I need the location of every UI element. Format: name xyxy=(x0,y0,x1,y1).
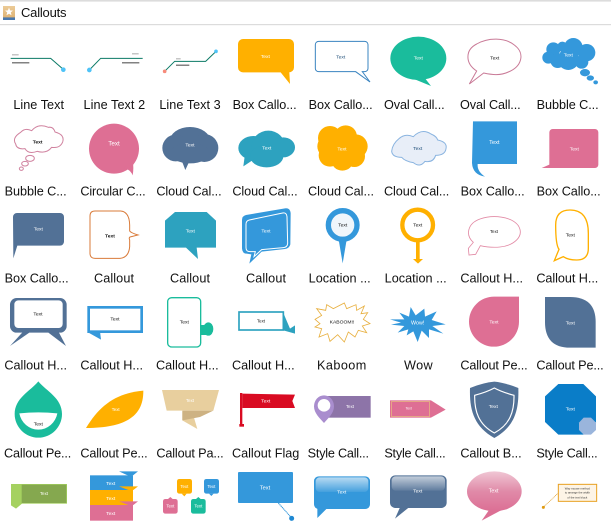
callout: Line Text 2 xyxy=(83,53,145,112)
callout: glossy blue xyxy=(314,476,370,518)
callout: Line Text 2: Line Text 2 xyxy=(83,98,145,112)
callout: Line Text 3 xyxy=(159,49,221,112)
callout: Callout blue frame: Text xyxy=(261,229,271,235)
callout: stacked ribbons: Text xyxy=(106,481,116,487)
callout: Callout Badge shield: Callout B... xyxy=(460,446,522,460)
callout: blue box with pointer xyxy=(238,472,294,521)
callout: Callout Flag xyxy=(232,393,299,460)
callout: Style green banner: Text xyxy=(40,491,49,496)
callout: Callout orange outline: Callout xyxy=(94,272,134,286)
callout: Callout Heart amber: Callout H... xyxy=(536,272,598,286)
callout: glossy dark: Text xyxy=(413,489,423,495)
callout: Cloud Callout amber xyxy=(308,125,374,199)
callout: Cloud Callout light: Text xyxy=(413,146,423,152)
callout: blue box with pointer: Text xyxy=(260,486,271,492)
callout: Location blue: Location ... xyxy=(309,272,371,286)
callout: Location blue: Text xyxy=(338,223,348,229)
callout: Cloud Callout dark xyxy=(156,127,222,199)
callout: Style Callout pink arrow xyxy=(384,400,446,460)
callout: Callout teal: Text xyxy=(186,229,196,235)
callout: Cloud Callout light xyxy=(384,132,449,199)
callout: glossy dark xyxy=(390,475,447,519)
callout: Box Callout amber: Box Callo... xyxy=(233,98,297,112)
callout: Callout Paper ribbon: Text xyxy=(186,398,195,403)
callout: Circular Callout: Text xyxy=(108,140,120,147)
callout: Oval Callout teal: Oval Call... xyxy=(384,98,445,112)
callout: annotation note: to arrange the width xyxy=(565,491,590,495)
callout: Bubble Callout outline: Bubble C... xyxy=(5,185,67,199)
callout: Callout Heart amber xyxy=(536,210,598,286)
callout: Bubble Callout blue: Bubble C... xyxy=(537,98,599,112)
callout: Callout Heart dark: Text xyxy=(33,312,43,318)
callout: Oval Callout teal xyxy=(384,37,446,112)
callout: Kaboom xyxy=(315,303,370,373)
callout: four small bubbles: Text xyxy=(180,484,189,489)
callout: four small bubbles: Text xyxy=(207,484,216,489)
callout: Callout orange outline: Text xyxy=(105,234,115,240)
callout: Box Callout pink xyxy=(537,129,601,199)
callout: Location amber xyxy=(385,210,447,286)
callout: Location amber: Location ... xyxy=(385,272,447,286)
callout: Box Callout blue: Box Callo... xyxy=(461,185,525,199)
callout: glossy pink oval xyxy=(467,471,522,521)
callout: Callout Badge shield xyxy=(460,382,522,460)
callout: Callout Petal pink: Text xyxy=(489,320,499,326)
callout: Wow: Wow! xyxy=(411,320,424,326)
callout: Cloud Callout light: Cloud Cal... xyxy=(384,185,449,199)
callout: Wow xyxy=(390,307,446,373)
callout: Callout Heart teal xyxy=(156,298,219,373)
callout: Style Callout purple pin xyxy=(308,395,371,460)
callout: Style Callout octagon xyxy=(536,384,598,460)
callout: Callout Heart teal: Callout H... xyxy=(156,359,219,373)
callout: Style Callout purple pin: Text xyxy=(346,404,355,409)
callout: Cloud Callout dark: Text xyxy=(185,143,195,149)
callout: Callout Heart small teal: Callout H... xyxy=(232,359,295,373)
callout: Box Callout outline xyxy=(309,41,373,112)
callout: Callout blue frame xyxy=(242,208,291,286)
callout: Box Callout outline: Box Callo... xyxy=(309,98,373,112)
callout: Callout Heart oval: Text xyxy=(490,229,499,234)
callout: Callout Heart dark xyxy=(4,298,67,373)
callout: Style Callout octagon: Text xyxy=(566,407,576,413)
callout: Callout blue frame: Callout xyxy=(246,272,286,286)
callout: Callout Heart small teal xyxy=(232,311,295,373)
callout: Cloud Callout teal: Cloud Cal... xyxy=(232,185,298,199)
callout: stacked ribbons: Text xyxy=(106,496,116,502)
callout: Cloud Callout teal xyxy=(232,131,298,199)
callout: Callout Flag: Text xyxy=(261,399,271,405)
callout: Callout Heart blue: Callout H... xyxy=(80,359,143,373)
callout: Box Callout amber: Text xyxy=(261,54,271,60)
callout: glossy blue: Text xyxy=(337,490,347,496)
callout: Cloud Callout amber: Text xyxy=(337,146,347,152)
callout: Style Callout pink arrow: Style Call... xyxy=(384,446,446,460)
callout: Oval Callout outline: Oval Call... xyxy=(460,98,521,112)
callout: Style green banner xyxy=(11,484,67,509)
callout: four small bubbles: Text xyxy=(166,504,175,509)
callout: Callout Heart blue: Text xyxy=(110,317,120,323)
callout: Callout Petal dark xyxy=(536,297,604,373)
callout: four small bubbles: Text xyxy=(194,504,203,509)
callout: Callout Petal pink xyxy=(460,297,528,373)
callout: Box Callout pink: Box Callo... xyxy=(537,185,601,199)
callout: Bubble Callout outline: Text xyxy=(33,139,43,145)
callout: Callout Flag: Callout Flag xyxy=(232,446,299,460)
callout: Cloud Callout teal: Text xyxy=(262,145,272,151)
callout: Style Callout purple pin: Style Call... xyxy=(308,446,369,460)
callout: Callout Heart teal: Text xyxy=(180,320,190,326)
callout: Bubble Callout outline xyxy=(5,126,67,199)
callout: Box Callout dark: Text xyxy=(34,227,44,233)
callout: Bubble Callout blue: Text xyxy=(564,53,574,59)
callout: Circular Callout xyxy=(80,124,146,199)
callout: Kaboom: KABOOM!! xyxy=(330,320,354,326)
callout: Callout Heart amber: Text xyxy=(566,233,576,239)
callout: annotation note xyxy=(542,484,597,509)
header bar xyxy=(0,0,611,25)
callout: Oval Callout teal: Text xyxy=(414,56,424,62)
callout: Location amber: Text xyxy=(413,223,423,229)
callout: Line Text 3: Line Text 3 xyxy=(159,98,221,112)
callout: Line Text xyxy=(11,54,66,112)
callout: four small bubbles xyxy=(163,479,219,514)
callout: Box Callout amber xyxy=(233,39,297,112)
callout: Callout Petal teal drop: Callout Pe... xyxy=(4,446,71,460)
callout: Box Callout blue xyxy=(461,121,525,199)
callout: Oval Callout outline xyxy=(460,39,521,112)
callout: Callout Heart dark: Callout H... xyxy=(4,359,67,373)
callout: annotation note: of the text block xyxy=(567,495,588,499)
callout: Style Callout octagon: Style Call... xyxy=(536,446,598,460)
callout: Callout Heart blue xyxy=(80,307,143,373)
callout: Callout Petal amber leaf: Text xyxy=(112,407,120,412)
title: Callouts xyxy=(21,5,67,20)
callout: glossy pink oval: Text xyxy=(489,489,499,495)
callout: Cloud Callout amber: Cloud Cal... xyxy=(308,185,374,199)
callout: Callout Heart oval xyxy=(460,217,523,286)
callout: Callout Paper ribbon: Callout Pa... xyxy=(156,446,224,460)
callout: Box Callout dark: Box Callo... xyxy=(5,272,69,286)
callout: Location blue xyxy=(309,211,371,286)
callout: Callout Petal amber leaf: Callout Pe... xyxy=(80,446,148,460)
callout: Box Callout pink: Text xyxy=(570,146,580,152)
callout: Kaboom: Kaboom xyxy=(317,359,366,373)
callout: Callout orange outline xyxy=(90,211,138,286)
callout: stacked ribbons xyxy=(90,471,138,521)
callout: Callout Petal amber leaf xyxy=(80,391,148,460)
callout: Callout Badge shield: Text xyxy=(489,404,499,410)
callout: Box Callout blue: Text xyxy=(489,140,500,146)
callout: Callout Petal teal drop xyxy=(4,381,71,460)
callout: Callout Petal dark: Callout Pe... xyxy=(536,359,604,373)
callout: Callout Petal dark: Text xyxy=(566,320,576,326)
callout: Box Callout outline: Text xyxy=(336,55,346,61)
callout: Callout teal: Callout xyxy=(170,272,210,286)
callout: Style Callout pink arrow: Text xyxy=(406,407,412,411)
callout: annotation note: Way mouse method xyxy=(565,487,590,491)
callout: Circular Callout: Circular C... xyxy=(80,185,146,199)
callout: stacked ribbons: Text xyxy=(106,511,116,517)
callout: Callout Petal pink: Callout Pe... xyxy=(460,359,528,373)
callout: Wow: Wow xyxy=(404,359,434,373)
icon: callouts star xyxy=(3,6,15,20)
callout: Callout Petal teal drop: Text xyxy=(34,422,44,428)
callout: Callout Paper ribbon xyxy=(156,390,224,460)
callout: Callout teal xyxy=(165,212,216,286)
callout: Callout Heart oval: Callout H... xyxy=(460,272,523,286)
callout: Callout Heart small teal: Text xyxy=(257,319,266,324)
callout: Oval Callout outline: Text xyxy=(490,56,500,62)
callout: Box Callout dark xyxy=(5,213,69,286)
callout: Line Text: Line Text xyxy=(13,98,64,112)
callout: Bubble Callout blue xyxy=(537,38,599,112)
callout: Cloud Callout dark: Cloud Cal... xyxy=(156,185,222,199)
